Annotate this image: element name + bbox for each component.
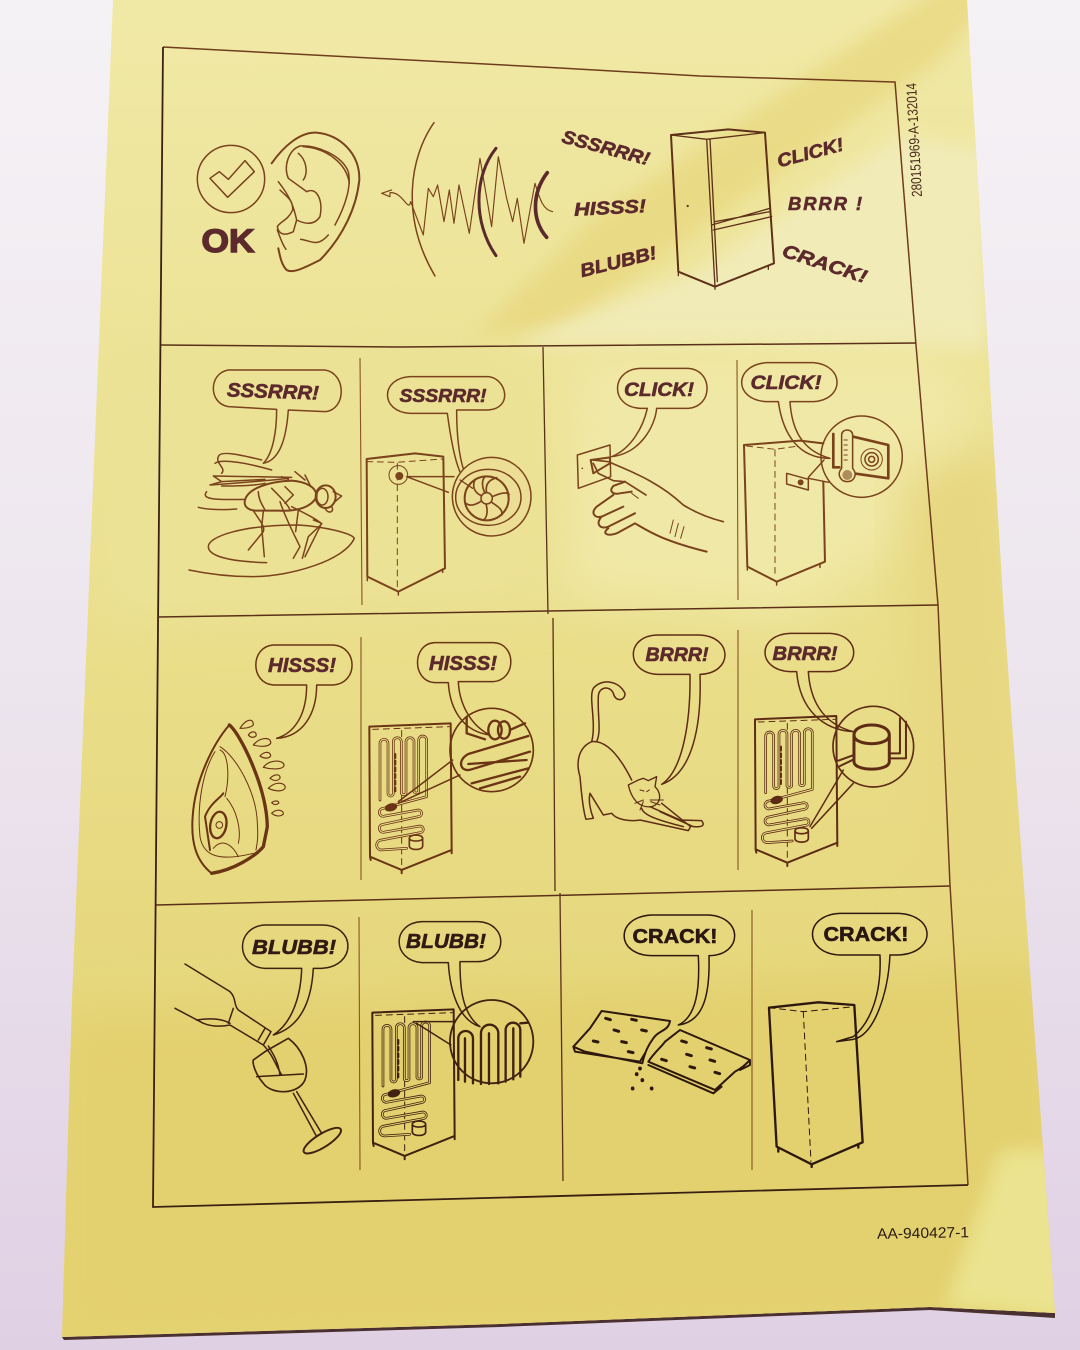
bubble text: BRRR! [646, 644, 709, 666]
bubble text: BLUBB! [406, 931, 486, 953]
bubble text: CLICK! [750, 372, 822, 394]
bubble text: SSSRRR! [400, 385, 486, 406]
sound words left: BLUBB! [578, 242, 659, 281]
icon: fridge with thermostat [744, 416, 902, 585]
panel: cracker, crack [573, 913, 927, 1167]
sound words right: CLICK! [775, 134, 846, 171]
sound words left [560, 126, 659, 281]
panel: cat, brrr [578, 633, 914, 866]
panel: wine, blubb [175, 922, 533, 1159]
bubble [256, 645, 352, 738]
icon: OK check circle [197, 145, 265, 213]
bubble text: SSSRRR! [227, 379, 320, 405]
bubble [213, 370, 341, 463]
icon: fridge with compressor [755, 706, 914, 866]
bubble [417, 643, 511, 735]
bubble text: BRRR! [772, 643, 838, 665]
bubble text: HISSS! [268, 655, 336, 677]
sound words left: HISSS! [574, 195, 647, 220]
icon: plain fridge [769, 1002, 863, 1167]
icon: fridge with tubes [372, 1000, 533, 1159]
bubble [612, 368, 707, 457]
bubble text: BLUBB! [252, 937, 336, 959]
icon: broken cracker [573, 1011, 750, 1093]
bubble text: CRACK! [824, 924, 908, 946]
main frame and grid [153, 47, 968, 1207]
icon: fridge with fan [367, 453, 531, 595]
bubble [742, 363, 837, 458]
bubble [624, 915, 735, 1025]
bubble text: CLICK! [624, 379, 695, 401]
icon: fly [189, 453, 354, 577]
sound words right: BRRR ! [788, 193, 862, 214]
reference code: AA-940427-1 [877, 1224, 969, 1243]
icon: fridge with coils [369, 708, 533, 873]
icon: hand pressing switch [577, 445, 723, 552]
bubble [812, 913, 927, 1042]
icon: iron with steam [192, 720, 285, 873]
bubble text: HISSS! [429, 653, 497, 675]
sound words right [775, 134, 870, 287]
panel: intro, sounds the fridge makes [197, 123, 870, 289]
panel: iron, hisss [192, 643, 533, 873]
bubble [765, 633, 854, 732]
icon: fridge [671, 129, 774, 289]
sound words left: SSSRRR! [560, 126, 652, 169]
bubble [242, 925, 348, 1035]
icon: ear and sound wave [272, 123, 553, 276]
bubble [399, 922, 501, 1027]
bubble text: CRACK! [632, 926, 718, 948]
sound words right: CRACK! [780, 240, 870, 287]
document code: 280151969-A-132014 [904, 83, 926, 197]
bubble [387, 377, 505, 488]
panel: light switch, click [577, 363, 902, 585]
icon: wine bottle and glass [175, 964, 344, 1158]
panel: fly, sssrrr [189, 370, 531, 595]
bubble [633, 635, 725, 784]
icon: stretching cat [578, 682, 703, 831]
OK label: OK [202, 223, 254, 259]
